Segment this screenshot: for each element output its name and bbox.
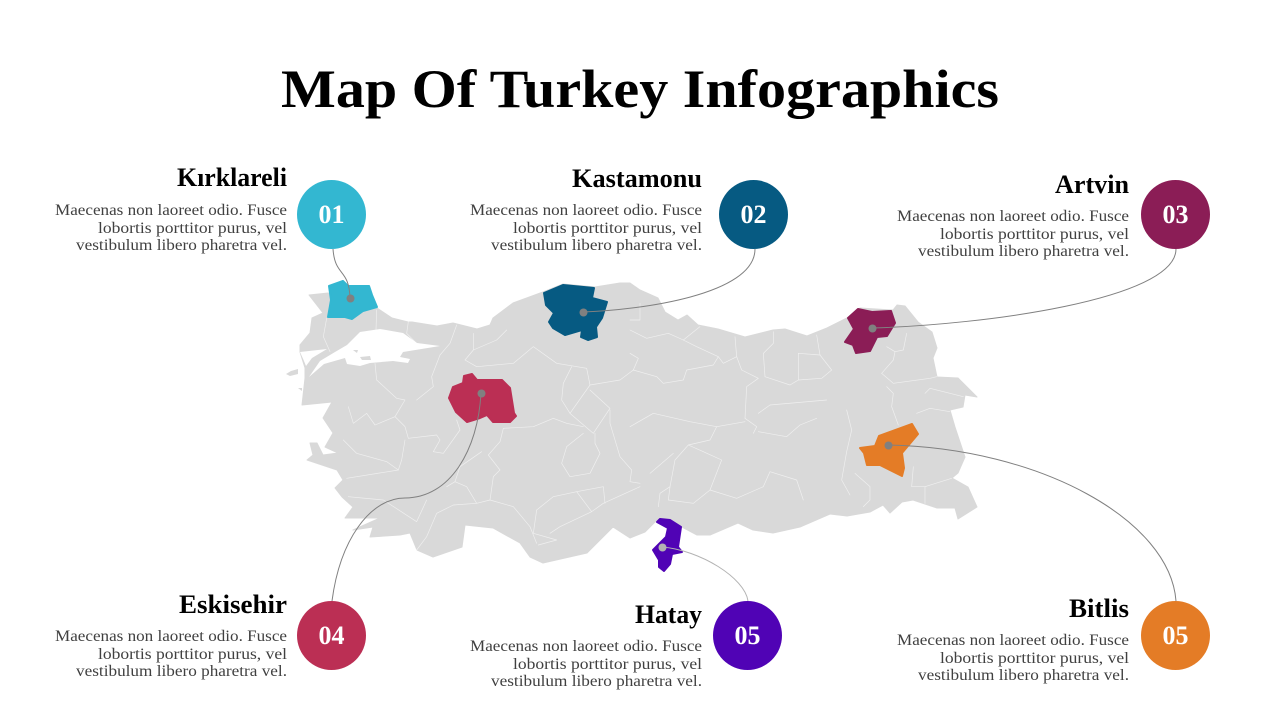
callout 01: Kirklareli: vestibulum libero pharetra vel. xyxy=(76,237,287,254)
connector: Eskisehir xyxy=(332,390,486,601)
callout 05: Hatay: vestibulum libero pharetra vel. xyxy=(491,673,702,690)
province borders west xyxy=(323,310,640,550)
callout 04: Eskisehir: lobortis porttitor purus, vel xyxy=(98,646,287,663)
callout 05: Bitlis: vestibulum libero pharetra vel. xyxy=(918,667,1129,684)
callout 04: Eskisehir: vestibulum libero pharetra vel. xyxy=(76,663,287,680)
connector: Hatay xyxy=(658,544,748,601)
callout 02: Kastamonu xyxy=(470,164,788,254)
callout 03: Artvin: Maecenas non laoreet odio. Fusce xyxy=(897,208,1129,225)
province: Artvin xyxy=(845,309,895,353)
callout 05: Bitlis: lobortis porttitor purus, vel xyxy=(940,650,1129,667)
callout 03: Artvin: vestibulum libero pharetra vel. xyxy=(918,243,1129,260)
province borders east xyxy=(630,303,963,507)
province: Hatay xyxy=(653,519,682,571)
province: Kastamonu xyxy=(544,285,607,340)
callout 03: Artvin: 03 xyxy=(1162,200,1188,229)
connector: Artvin xyxy=(868,249,1176,332)
sea of Marmara xyxy=(309,329,440,377)
callout 04: Eskisehir: Maecenas non laoreet odio. Fusce xyxy=(55,628,287,645)
callout 01: Kirklareli: lobortis porttitor purus, vel xyxy=(98,220,287,237)
map: Turkey xyxy=(286,283,977,563)
callout 05: Bitlis: Maecenas non laoreet odio. Fusce xyxy=(897,632,1129,649)
callout 01: Kirklareli xyxy=(55,163,366,254)
callout 03: Artvin: Artvin xyxy=(1055,170,1130,199)
callout 01: Kirklareli: Kırklareli xyxy=(177,163,287,192)
callout 05: Hatay: 05 xyxy=(734,621,760,650)
callout 05: Hatay: Maecenas non laoreet odio. Fusce xyxy=(470,638,702,655)
connector: Kastamonu xyxy=(580,249,755,316)
callout 03: Artvin: lobortis porttitor purus, vel xyxy=(940,226,1129,243)
province: Kirklareli xyxy=(328,281,377,319)
callout 02: Kastamonu: lobortis porttitor purus, vel xyxy=(513,220,702,237)
callout 02: Kastamonu: 02 xyxy=(740,200,766,229)
callout 03: Artvin xyxy=(897,170,1210,260)
callout 01: Kirklareli: Maecenas non laoreet odio. Fusce xyxy=(55,202,287,219)
callout 04: Eskisehir xyxy=(55,590,366,680)
callout 02: Kastamonu: vestibulum libero pharetra vel. xyxy=(491,237,702,254)
callout 01: Kirklareli: 01 xyxy=(318,200,344,229)
connector: Bitlis xyxy=(884,442,1176,601)
callout 05: Hatay: lobortis porttitor purus, vel xyxy=(513,656,702,673)
callout 05: Bitlis: Bitlis xyxy=(1069,594,1129,623)
province: Bitlis xyxy=(860,424,918,476)
callout 02: Kastamonu: Kastamonu xyxy=(572,164,702,193)
title: Map Of Turkey Infographics xyxy=(281,59,999,119)
callout 05: Bitlis: 05 xyxy=(1162,621,1188,650)
callout 05: Bitlis xyxy=(897,594,1210,684)
callout 05: Hatay: Hatay xyxy=(635,600,702,629)
callout 04: Eskisehir: Eskisehir xyxy=(179,590,287,619)
callout 02: Kastamonu: Maecenas non laoreet odio. Fusce xyxy=(470,202,702,219)
province: Eskisehir xyxy=(449,374,516,422)
connector: Kirklareli xyxy=(333,249,354,302)
gulf of Saros xyxy=(300,349,327,366)
callout 04: Eskisehir: 04 xyxy=(318,621,344,650)
callout 05: Hatay xyxy=(470,600,782,690)
